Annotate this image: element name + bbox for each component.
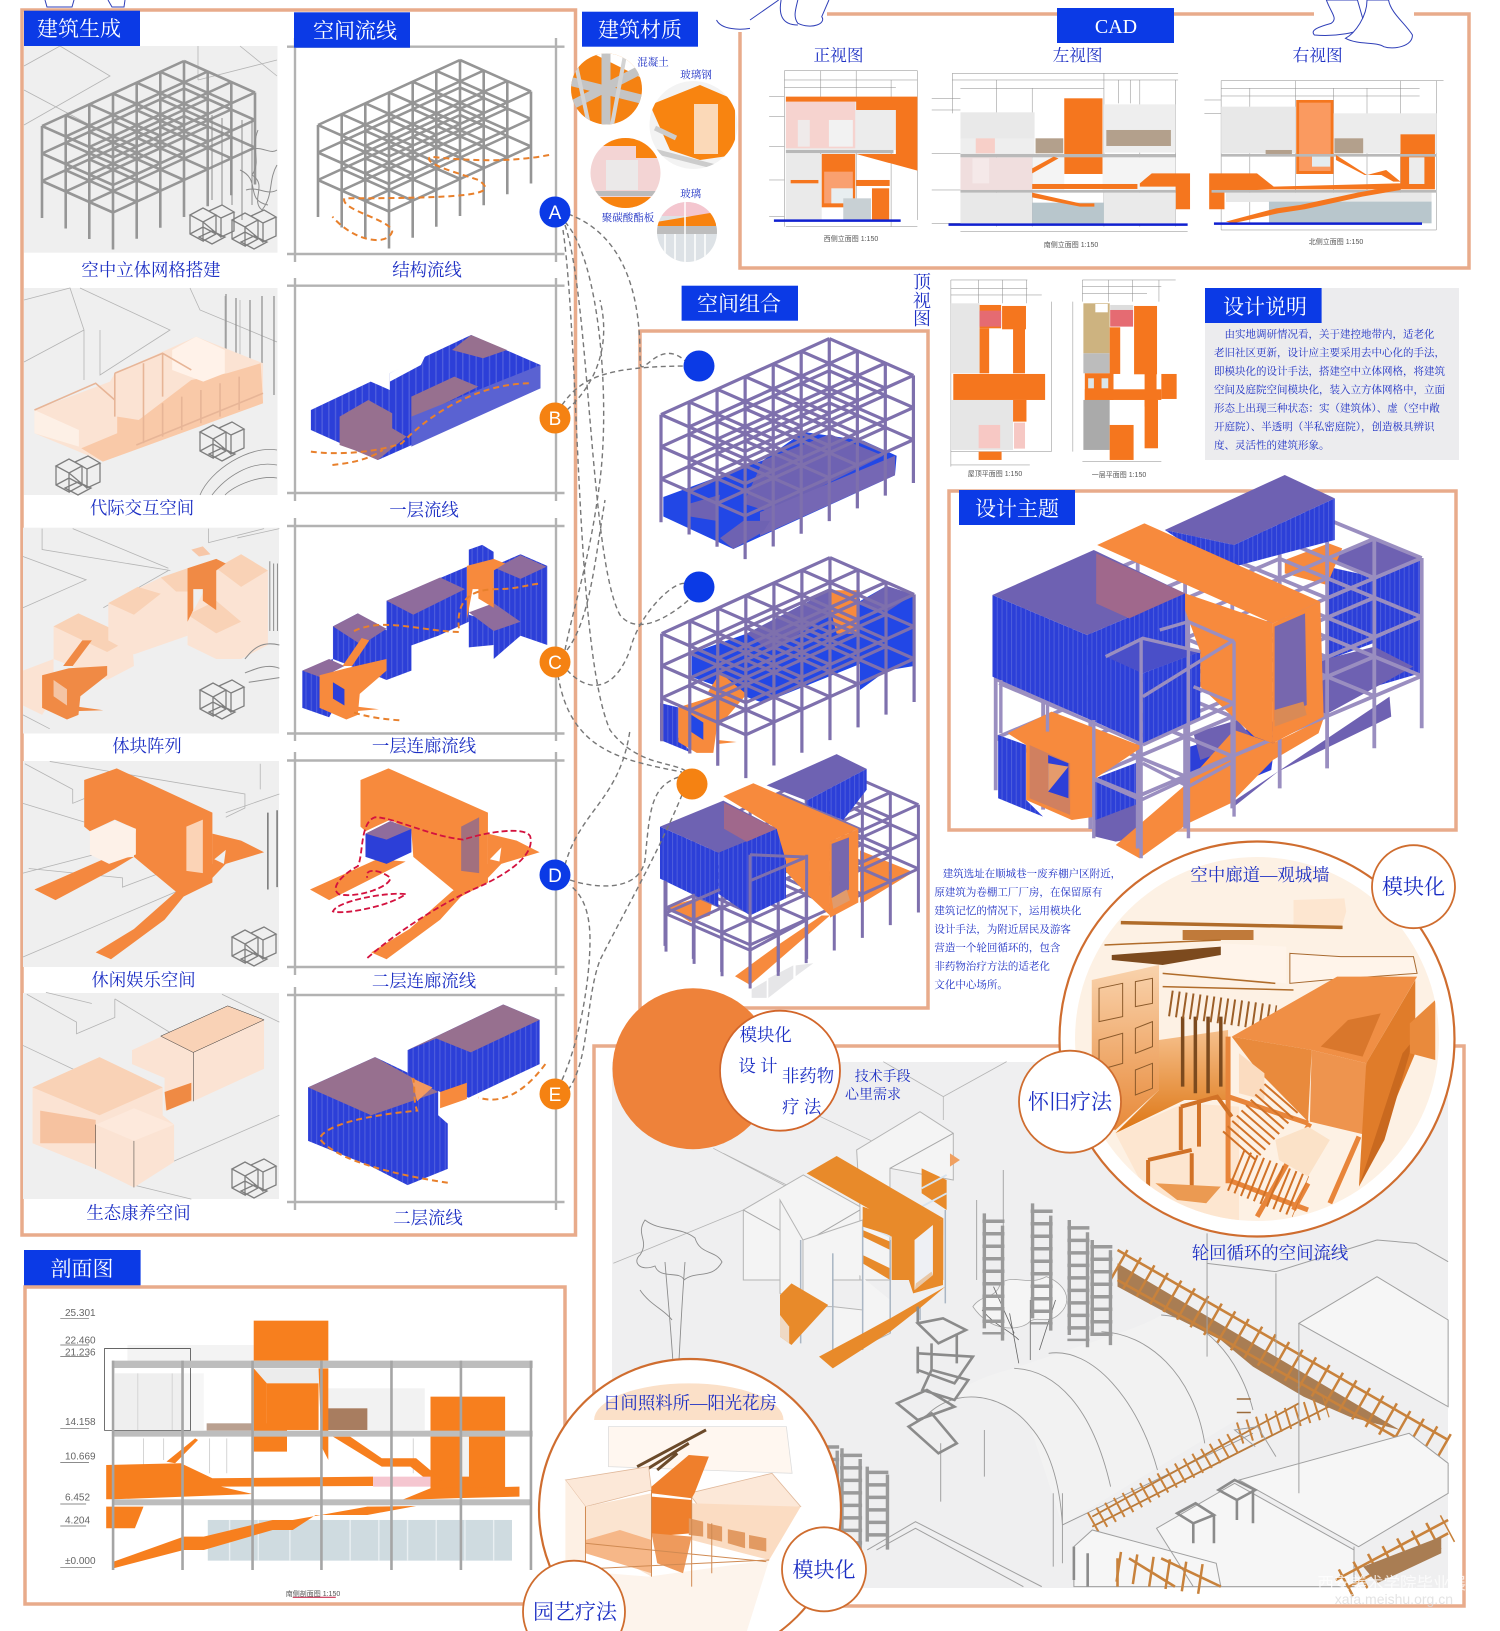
text panel: design description: 即模块化的设计手法，搭建空中立体网格，将建筑 (1214, 365, 1445, 378)
text block: site description: 设计手法，为附近居民及游客 (934, 922, 1071, 936)
badge: E (540, 1078, 570, 1110)
label: circular circulation: 轮回循环的空间流线 (1192, 1243, 1349, 1263)
heading: building generation: 建筑生成 (37, 17, 121, 41)
section level labels: 4.204 (65, 1516, 90, 1526)
text block: site description: 文化中心场所。 (934, 978, 1008, 991)
badge: A: A (549, 203, 562, 224)
elevation captions (824, 234, 1363, 249)
drawing: front elevation (769, 71, 917, 227)
captions: left column and circulation column: 一层流线 (389, 500, 459, 520)
captions: left column and circulation column: 结构流线 (392, 260, 462, 280)
text panel: design description: 空间及庭院空间模块化，装入立方体网格中，立面 (1214, 383, 1445, 396)
figures: line-art feet overlapping the top edge (45, 0, 1414, 48)
material swatch: concrete (571, 54, 642, 124)
circle: nostalgia therapy: 怀旧疗法 (1028, 1090, 1113, 1114)
watermark: xafa.meishu.org.cn (1335, 1591, 1453, 1607)
heading: design theme: 设计主题 (975, 497, 1059, 521)
badge: B: B (549, 409, 561, 430)
captions: left column and circulation column: 体块阵列 (112, 736, 182, 756)
section level labels: 10.669 (65, 1452, 96, 1462)
circle: modular label top (1372, 845, 1455, 928)
section level labels: 21.236 (65, 1348, 96, 1358)
heading: space composition (682, 286, 798, 321)
badge: C (540, 646, 570, 678)
heading: spatial circulation: 空间流线 (313, 19, 397, 43)
image: generation step 5, wellness space (23, 992, 279, 1199)
badge: B (540, 402, 570, 434)
view labels: 正视图 (813, 46, 864, 65)
panel: CAD drawings (740, 14, 1469, 268)
material swatch: glass (656, 200, 718, 264)
section level labels: 14.158 (65, 1417, 96, 1428)
material swatch: polycarbonate (590, 136, 662, 210)
circle: modular label bottom: 模块化 (792, 1558, 856, 1582)
watermark: 西安美术学院毕业展 (1318, 1574, 1466, 1593)
drawing: plan one (951, 280, 1051, 467)
circle: non-drug therapy notes (720, 1011, 840, 1131)
image: generation step 2, intergenerational space (24, 288, 278, 495)
marker dots for models (676, 350, 714, 800)
notes: technique and psychological needs (845, 1068, 911, 1103)
diagram: first floor circulation (311, 335, 540, 465)
diagram: second floor circulation (308, 1004, 545, 1185)
drawing: design theme axonometric (959, 475, 1422, 858)
material labels (602, 56, 712, 224)
plan captions: 屋顶平面图 1:150 (968, 470, 1022, 478)
notes: technique and psychological needs: 心里需求 (845, 1086, 901, 1103)
heading: space composition: 空间组合 (697, 292, 781, 316)
plan captions (968, 470, 1146, 479)
view labels: 右视图 (1293, 46, 1343, 65)
view labels: 左视图 (1053, 46, 1103, 65)
text panel: design description: 老旧社区更新，设计应主要采用去中心化的手法， (1214, 346, 1445, 359)
circle: modular label bottom (782, 1527, 866, 1611)
label: top view: 视 (913, 291, 931, 311)
captions: left column and circulation column: 二层流线 (393, 1208, 463, 1228)
panel: aerial perspective frame (594, 1046, 1464, 1606)
heading: CAD (1057, 8, 1174, 43)
heading: building generation (24, 11, 140, 46)
text block: site description: 原建筑为卷棚工厂厂房，在保留原有 (934, 886, 1103, 898)
circle: non-drug therapy notes: 非药物 (782, 1066, 834, 1086)
watermark (1318, 1574, 1466, 1607)
circle: nostalgia therapy (1019, 1051, 1121, 1153)
text block: site description: 非药物治疗方法的适老化 (934, 960, 1050, 972)
section level labels: ±0.000 (65, 1556, 96, 1567)
heading: building materials: 建筑材质 (598, 18, 682, 42)
drawing: plan two (1073, 280, 1177, 462)
frames: circulation diagram brackets (287, 38, 564, 1210)
circle: horticultural therapy: 园艺疗法 (533, 1600, 618, 1624)
elevation captions: 北侧立面图 1:150 (1309, 237, 1363, 246)
badge: C: C (548, 653, 562, 674)
panel: left generation and circulation frame (22, 10, 576, 1235)
circle: sunlight garden vignette (539, 1359, 841, 1631)
text panel: design description: 设计说明 (1223, 295, 1307, 319)
elevation captions: 南侧立面图 1:150 (1044, 240, 1098, 249)
circle: modular label top: 模块化 (1382, 875, 1445, 899)
diagram: second floor corridor circulation (310, 768, 540, 959)
section caption: 南侧剖面图 1:150 (286, 1589, 340, 1598)
text panel: design description: 形态上出现三种状态：实（建筑体）、虚（空中敞 (1214, 402, 1440, 415)
diagram: first floor corridor circulation (302, 545, 547, 720)
heading: design theme (959, 490, 1075, 525)
diagram: structural circulation (318, 60, 549, 248)
heading: section: 剖面图 (50, 1257, 114, 1281)
text panel: design description: 度、灵活性的建筑形象。 (1214, 439, 1330, 452)
circle: non-drug therapy notes: 疗 法 (782, 1097, 822, 1117)
section level labels (65, 1308, 96, 1567)
panel: space composition frame (640, 331, 928, 1008)
plan captions: 一层平面图 1:150 (1092, 471, 1146, 479)
drawing: building section (60, 1318, 533, 1597)
section level labels: 22.460 (65, 1336, 96, 1346)
material swatch: fiberglass (648, 80, 740, 172)
material labels: 混凝土 (637, 56, 669, 68)
badge: E: E (549, 1085, 561, 1106)
section level labels: 25.301 (65, 1308, 96, 1319)
drawing: left elevation (932, 73, 1190, 232)
captions: left column and circulation column: 一层连廊流线 (372, 736, 477, 756)
captions: left column and circulation column: 空中立体网格搭建 (81, 260, 221, 280)
label: top view (913, 272, 932, 329)
image: generation step 3, volume array (23, 528, 279, 734)
circle: non-drug therapy notes: 模块化 (740, 1025, 792, 1045)
label: top view: 图 (913, 309, 931, 329)
notes: technique and psychological needs: 技术手段 (855, 1068, 911, 1085)
material labels: 玻璃 (680, 187, 702, 200)
circle: non-drug therapy notes: 设 计 (738, 1056, 778, 1076)
captions: left column and circulation column: 代际交互空间 (90, 498, 194, 518)
connectors: dashed links between badges and models (558, 214, 699, 1090)
heading: CAD: CAD (1095, 16, 1137, 38)
model: grid with first floor (661, 339, 913, 559)
badge: A (540, 196, 570, 228)
section level labels: 6.452 (65, 1492, 90, 1504)
model: grid with volumes (660, 754, 918, 998)
text block: site description: 建筑记忆的情况下，运用模块化 (934, 904, 1082, 917)
text block: site description (934, 867, 1121, 991)
circle: skywalk vignette (1060, 842, 1454, 1236)
text panel: design description: 由实地调研情况看，关于建控地带内，适老化 (1224, 328, 1435, 341)
label: skywalk: 空中廊道—观城墙 (1190, 865, 1330, 885)
text panel: design description (1205, 288, 1459, 460)
circle: large orange disc (612, 988, 774, 1149)
label: top view: 顶 (913, 272, 932, 292)
elevation captions: 西侧立面图 1:150 (824, 234, 878, 243)
panel: design theme frame (949, 491, 1456, 830)
heading: spatial circulation (294, 12, 410, 48)
material labels: 玻璃钢 (680, 68, 712, 81)
text block: site description: 建筑选址在顺城巷一废弃棚户区附近， (943, 867, 1121, 880)
badge: D: D (548, 866, 562, 887)
text panel: design description: 开庭院）、半透明（半私密庭院），创造极具辨识 (1214, 420, 1435, 433)
view labels (813, 46, 1343, 65)
model: grid with corridor (660, 558, 914, 778)
captions: left column and circulation column: 休闲娱乐空间 (91, 970, 196, 990)
heading: building materials (582, 12, 698, 47)
drawing: right elevation (1204, 81, 1444, 230)
image: aerial perspective of the site (612, 1062, 1448, 1588)
image: generation step 4, leisure space (23, 761, 279, 967)
captions: left column and circulation column: 生态康养空间 (86, 1203, 191, 1223)
circle: horticultural therapy (523, 1561, 625, 1631)
text block: site description: 营造一个轮回循环的，包含 (934, 941, 1061, 954)
material labels: 聚碳酸酯板 (602, 211, 655, 224)
label: sunlight garden: 日间照料所—阳光花房 (603, 1393, 777, 1413)
panel: section drawing frame (25, 1287, 565, 1604)
image: generation step 1, spatial grid (24, 46, 278, 253)
captions: left column and circulation column: 二层连廊流线 (372, 971, 477, 991)
captions: left column and circulation column (81, 260, 477, 1228)
heading: section (24, 1250, 141, 1286)
badge: D (540, 860, 570, 890)
